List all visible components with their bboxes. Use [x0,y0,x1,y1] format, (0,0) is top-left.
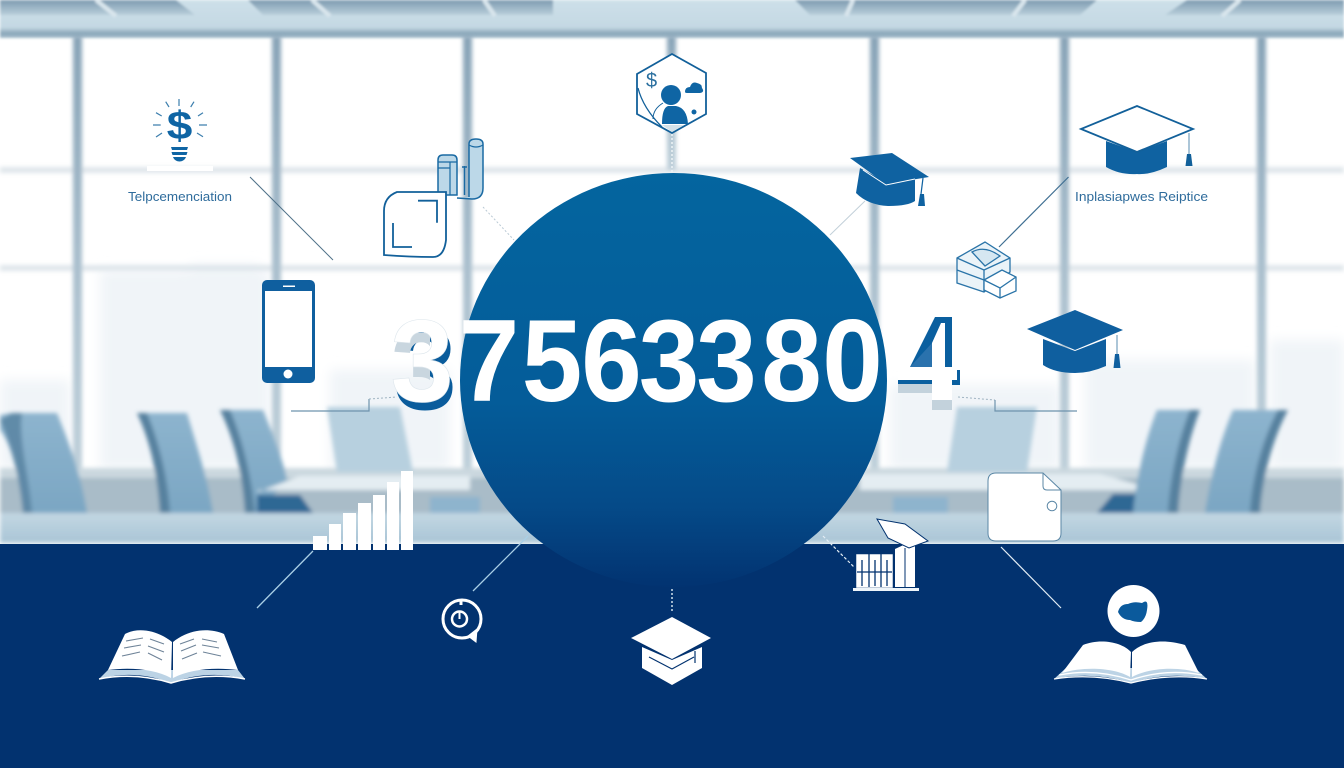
digit 3 with extruded shadow [393,319,452,410]
icon: open book left [99,630,245,683]
icon: smartphone [262,280,315,383]
digit 3 with extruded shadow: 3 [393,304,457,434]
icon: solid graduation cap [1027,310,1123,373]
label: right caption: Inplasiapwes Reiptice [1075,190,1208,204]
central circle [460,173,887,587]
icon: building with cap [853,519,928,591]
icon: hexagon with person [637,54,706,133]
icon: lightbulb with dollar sign: $ [167,104,192,148]
digit 3 with extruded shadow: 3 [390,300,454,430]
connector lines [250,134,1077,611]
digits 7563380: 7563380 [459,295,883,426]
label: left caption: Telpcemenciation [128,190,232,204]
icon: large outlined graduation cap [1081,106,1193,174]
digit 3 with extruded shadow: 3 [390,296,454,426]
big number [393,317,960,410]
icon: open book with globe [1054,585,1207,683]
digit 4 with extruded shadow and blue inset: 4 [897,295,960,425]
navy floor panel [0,544,1344,768]
bar chart icon [313,471,413,550]
icon: white graduation cap [631,617,711,685]
icon: small graduation cap [850,153,929,206]
icon: cubes [957,242,1016,298]
icon: clock [443,599,481,642]
icon: document card [988,473,1061,541]
icon: lightbulb with dollar sign [147,99,213,171]
digit 3 with extruded shadow: 3 [390,306,454,436]
icon: hexagon with person: $ [646,70,657,92]
icon: document with book columns [384,139,483,257]
